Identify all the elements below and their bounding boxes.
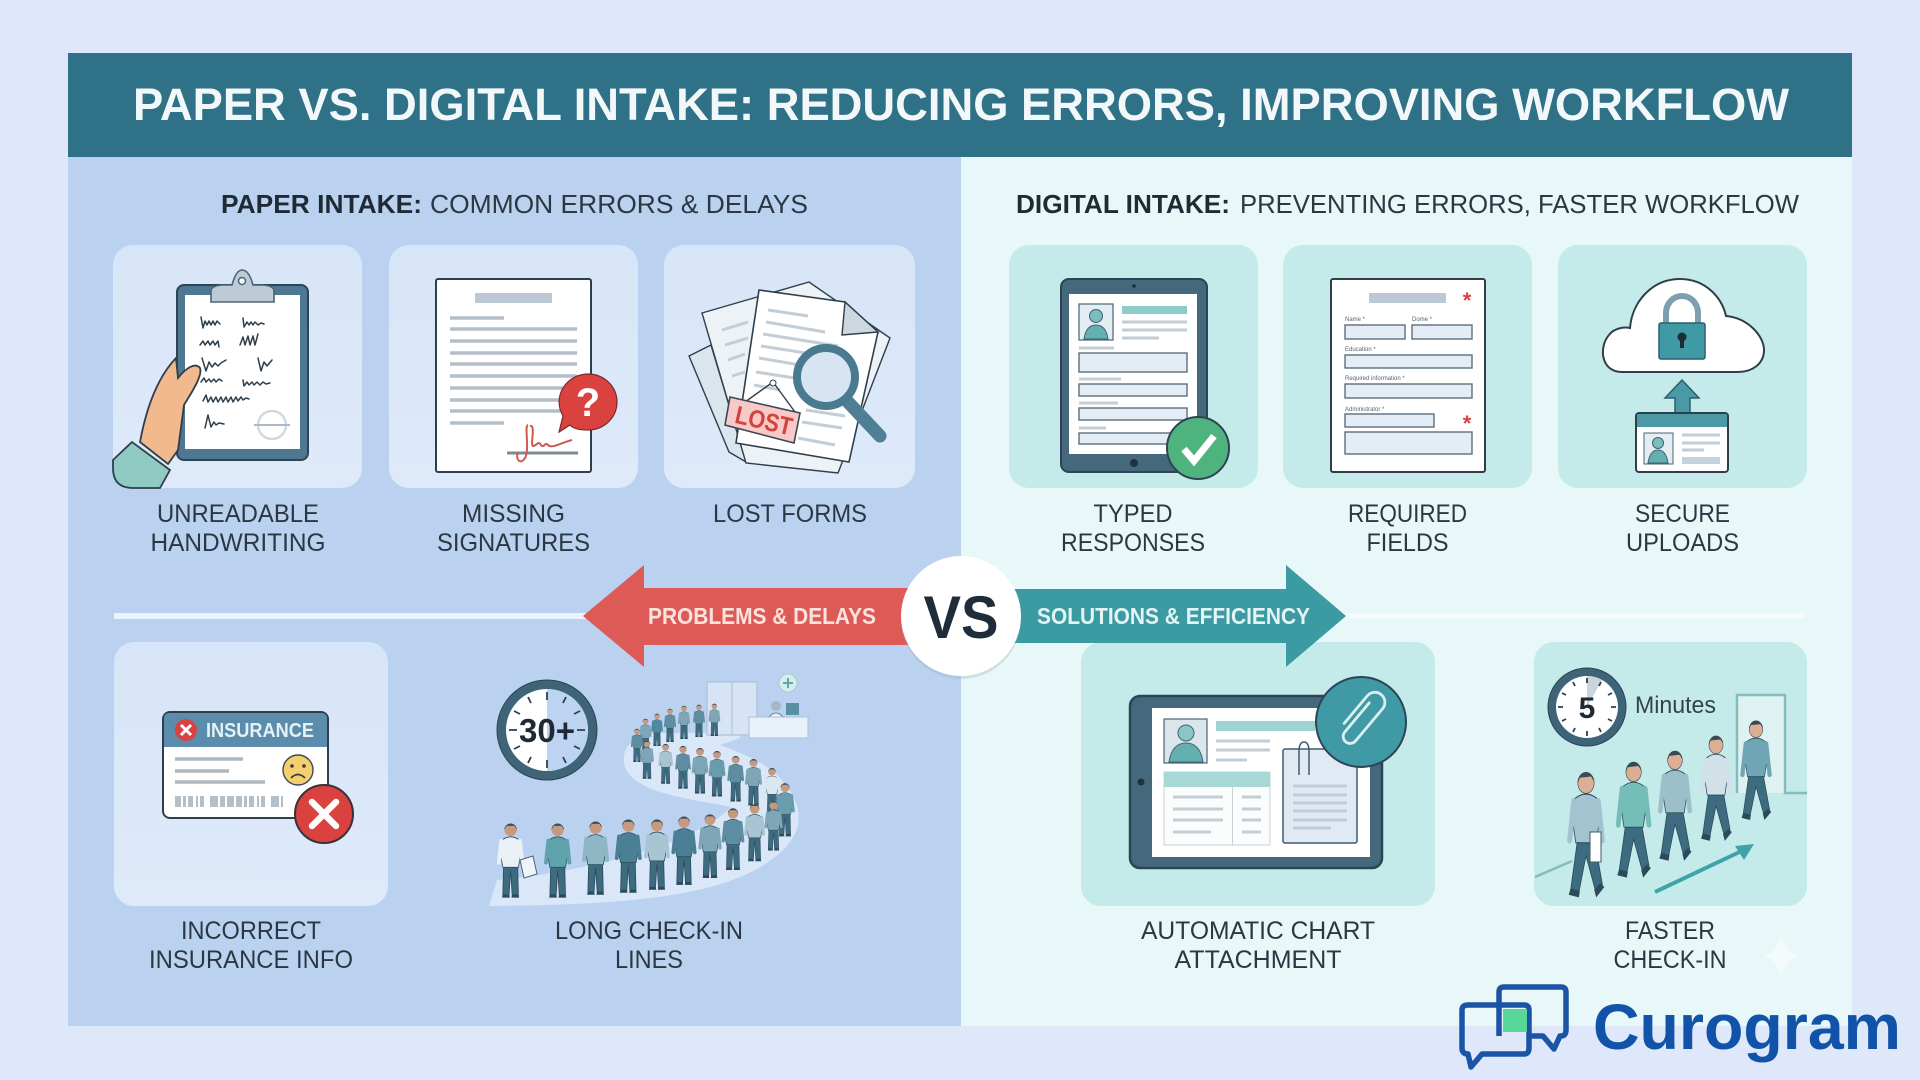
magnifier <box>848 402 880 436</box>
icon: tablet form <box>1061 279 1229 479</box>
icon: form with required fields: * <box>1463 411 1472 436</box>
arrow: problems and delays: PROBLEMS & DELAYS <box>648 603 876 629</box>
card: automatic chart attachment <box>1081 642 1435 974</box>
label: typed responses: RESPONSES <box>1061 529 1205 557</box>
logo icon: chat bubbles <box>1462 987 1566 1067</box>
hand <box>140 358 200 464</box>
sparkle mark <box>1764 932 1798 980</box>
icon: 5 minutes clock: 5 <box>1579 692 1595 725</box>
label: incorrect insurance info <box>149 917 353 974</box>
text: minutes: Minutes <box>1635 692 1716 719</box>
icon: 5 minutes clock <box>1548 668 1626 746</box>
title banner: PAPER VS. DIGITAL INTAKE: REDUCING ERRORS, IMPROVING WORKFLOW <box>133 79 1790 130</box>
sign: lost <box>725 380 800 443</box>
icon: insurance card <box>163 712 353 843</box>
vs badge: VS <box>924 584 998 651</box>
vs badge <box>901 556 1021 679</box>
sign: lost: LOST <box>732 401 795 441</box>
label: required fields: FIELDS <box>1366 529 1448 557</box>
card: missing signatures <box>389 245 638 557</box>
heading: paper intake: PAPER INTAKE: <box>221 189 422 219</box>
label: typed responses <box>1061 500 1205 557</box>
panel: digital intake <box>961 157 1852 1026</box>
icon: paperclip badge <box>1316 677 1406 767</box>
heading: paper intake: COMMON ERRORS & DELAYS <box>430 189 808 219</box>
label: incorrect insurance info: INCORRECT <box>181 917 321 945</box>
icon: scattered papers with magnifier <box>689 282 890 473</box>
label: incorrect insurance info: INSURANCE INFO <box>149 946 353 974</box>
label: secure uploads <box>1626 500 1739 557</box>
card: required fields <box>1283 245 1532 557</box>
icon: document with signature <box>436 279 617 472</box>
logo: curogram <box>1462 987 1901 1067</box>
label: lost forms: LOST FORMS <box>713 500 867 528</box>
icon: form with required fields <box>1331 279 1485 472</box>
divider: left <box>114 613 594 619</box>
logo wordmark: Curogram <box>1593 991 1901 1063</box>
label: secure uploads: SECURE <box>1635 500 1730 528</box>
panel: paper intake <box>68 157 961 1026</box>
icon: form with required fields: Education * <box>1345 347 1376 353</box>
label: missing signatures: SIGNATURES <box>437 529 590 557</box>
heading: digital intake: PREVENTING ERRORS, FASTER WORKFLOW <box>1240 189 1799 219</box>
card: typed responses <box>1009 245 1258 557</box>
title banner <box>68 53 1852 157</box>
label: faster check-in: CHECK-IN <box>1614 946 1726 974</box>
label: long check-in lines: LINES <box>615 946 683 974</box>
icon: cloud with lock and upload <box>1603 279 1764 472</box>
door <box>1737 695 1807 793</box>
icon: insurance card: INSURANCE <box>206 720 314 742</box>
queue of people <box>499 704 793 898</box>
arrow: problems and delays <box>583 565 910 667</box>
label: faster check-in: FASTER <box>1625 917 1715 945</box>
label: unreadable handwriting: HANDWRITING <box>150 529 326 557</box>
reception desk <box>707 674 808 738</box>
icon: 30+ clock: 30+ <box>519 712 575 749</box>
walking people <box>1569 721 1771 897</box>
heading: paper intake <box>221 189 808 219</box>
label: long check-in lines: LONG CHECK-IN <box>555 917 743 945</box>
label: unreadable handwriting <box>150 500 326 557</box>
icon: red cross badge <box>295 785 353 843</box>
label: unreadable handwriting: UNREADABLE <box>157 500 319 528</box>
icon: question bubble: ? <box>576 381 600 425</box>
icon: form with required fields: Administrator * <box>1345 407 1385 413</box>
label: faster check-in <box>1614 917 1726 974</box>
card: long check-in lines <box>489 674 808 974</box>
icon: landscape tablet with chart <box>1130 677 1406 868</box>
arrow: solutions and efficiency <box>1010 565 1346 667</box>
card: lost forms <box>664 245 915 528</box>
card: faster check-in <box>1534 642 1807 974</box>
label: typed responses: TYPED <box>1094 500 1172 528</box>
label: automatic chart attachment: AUTOMATIC CHART <box>1141 917 1375 945</box>
label: long check-in lines <box>555 917 743 974</box>
icon: form with required fields: Name * <box>1345 317 1366 323</box>
floor stripe <box>1535 861 1572 877</box>
icon: form with required fields: Dome * <box>1412 317 1433 323</box>
sleeve <box>113 442 170 488</box>
label: missing signatures: MISSING <box>462 500 565 528</box>
icon: clipboard in hand <box>113 270 308 488</box>
queue floor band <box>489 733 799 906</box>
card: secure uploads <box>1558 245 1807 557</box>
label: secure uploads: UPLOADS <box>1626 529 1739 557</box>
label: required fields: REQUIRED <box>1348 500 1467 528</box>
arrow: solutions and efficiency: SOLUTIONS & EFFICIENCY <box>1037 603 1310 629</box>
divider: right <box>1340 613 1805 618</box>
heading: digital intake: DIGITAL INTAKE: <box>1016 189 1230 219</box>
icon: form with required fields: * <box>1463 288 1472 313</box>
growth arrow <box>1655 844 1754 892</box>
icon: sad face <box>283 755 313 785</box>
card: incorrect insurance info <box>114 642 388 974</box>
icon: question bubble <box>559 374 617 432</box>
icon: green check badge <box>1167 417 1229 479</box>
label: required fields <box>1348 500 1467 557</box>
label: missing signatures <box>437 500 590 557</box>
icon: form with required fields: Required information * <box>1345 376 1405 382</box>
icon: 30+ clock <box>497 680 597 780</box>
label: automatic chart attachment <box>1141 917 1375 974</box>
label: automatic chart attachment: ATTACHMENT <box>1174 946 1342 974</box>
card: unreadable handwriting <box>113 245 362 557</box>
